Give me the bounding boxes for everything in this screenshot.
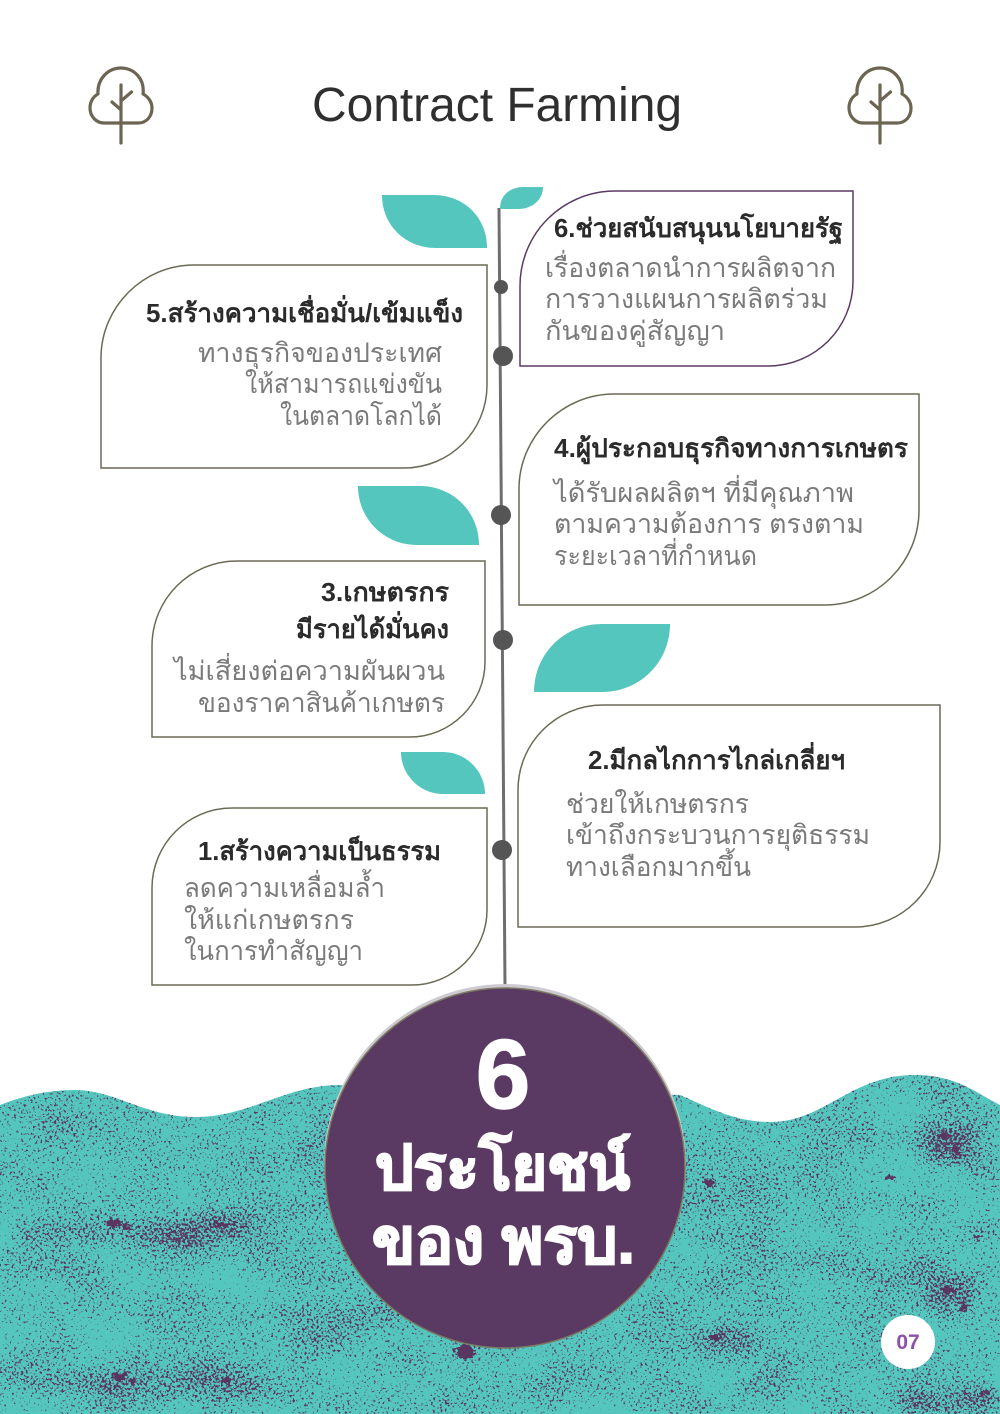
background wave with speckled texture (0, 1060, 1000, 1414)
panel: benefit 5 (101, 265, 487, 468)
panel: benefit 3: ไม่เสี่ยงต่อความผันผวน (172, 653, 445, 686)
central circle: 6 benefits: ประโยชน์ (375, 1132, 631, 1203)
panel: benefit 6: กันของคู่สัญญา (545, 316, 725, 347)
panel: benefit 5: 5.สร้างความเชื่อมั่น/เข้มแข็ง (146, 295, 463, 328)
panel: benefit 3 (152, 561, 485, 737)
stem nodes (491, 280, 513, 860)
panel: benefit 2: ช่วยให้เกษตรกร (566, 789, 749, 819)
panel: benefit 4: ได้รับผลผลิตฯ ที่มีคุณภาพ (552, 475, 854, 509)
panel: benefit 2 (518, 705, 940, 927)
panel: benefit 6: การวางแผนการผลิตร่วม (545, 284, 828, 314)
panel: benefit 2: ทางเลือกมากขึ้น (566, 848, 751, 882)
panel: benefit 3: 3.เกษตรกร (321, 579, 449, 607)
leaves (358, 187, 670, 794)
panel: benefit 2: 2.มีกลไกการไกล่เกลี่ยฯ (588, 742, 845, 775)
panel: benefit 4: 4.ผู้ประกอบธุรกิจทางการเกษตร (554, 434, 908, 465)
panel: benefit 1: ให้แก่เกษตรกร (184, 905, 354, 935)
panel: benefit 3: ของราคาสินค้าเกษตร (198, 688, 445, 718)
panel: benefit 1 (152, 808, 487, 985)
panel: benefit 6: เรื่องตลาดนำการผลิตจาก (545, 250, 836, 283)
page number (881, 1315, 935, 1369)
panel: benefit 3: มีรายได้มั่นคง (296, 611, 449, 644)
icon: tree right (849, 68, 911, 143)
panel: benefit 5: ให้สามารถแข่งขัน (245, 369, 442, 399)
central circle: 6 benefits: 6 (476, 1019, 530, 1129)
dark clumps (105, 1132, 989, 1396)
panel: benefit 6 (520, 191, 853, 366)
panel: benefit 4: ระยะเวลาที่กำหนด (554, 538, 757, 571)
panel: benefit 6: 6.ช่วยสนับสนุนนโยบายรัฐ (554, 213, 843, 246)
title: Contract Farming (312, 79, 682, 132)
panel: benefit 2: เข้าถึงกระบวนการยุติธรรม (566, 820, 870, 851)
panel: benefit 5: ในตลาดโลกได้ (280, 401, 442, 431)
panel: benefit 1: ในการทำสัญญา (184, 936, 363, 966)
panel: benefit 1: 1.สร้างความเป็นธรรม (198, 835, 441, 866)
page number: 07 (896, 1331, 920, 1354)
central circle: 6 benefits: ของ พรบ. (372, 1205, 635, 1277)
panel: benefit 4: ตามความต้องการ ตรงตาม (554, 509, 864, 539)
stem (499, 208, 505, 986)
icon: tree left (90, 68, 152, 143)
panel: benefit 5: ทางธุรกิจของประเทศ (198, 338, 442, 369)
panel: benefit 4 (519, 394, 919, 605)
panel: benefit 1: ลดความเหลื่อมล้ำ (184, 869, 385, 903)
central circle: 6 benefits (324, 984, 686, 1348)
